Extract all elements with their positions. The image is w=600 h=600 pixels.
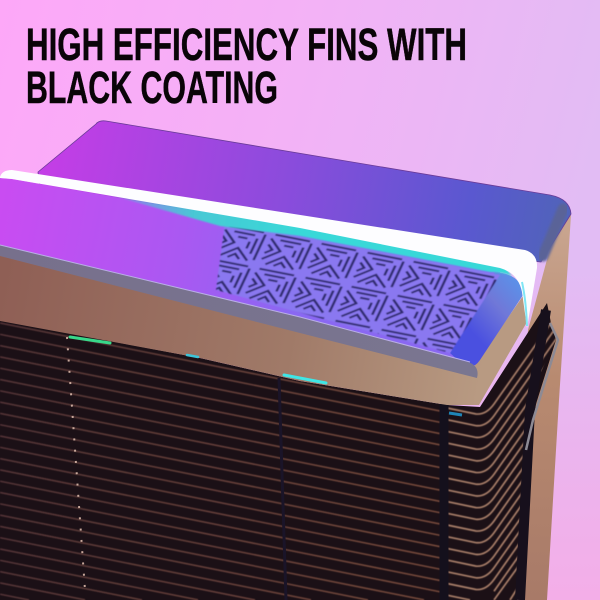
engraved triangle pattern	[216, 222, 500, 353]
fin edge highlights	[67, 337, 85, 590]
right side face of heatsink	[512, 215, 571, 600]
cyan tip of light bar	[522, 282, 527, 326]
cyan LED glint	[284, 375, 326, 383]
title: BLACK COATING	[26, 62, 278, 113]
front tan cap face	[0, 250, 527, 405]
dark vertical channel, right	[440, 404, 448, 600]
side slot outline	[526, 323, 558, 450]
back top plate	[38, 121, 571, 262]
fin highlight lines, main stack	[0, 323, 440, 600]
grey bevel edge	[0, 245, 478, 378]
heatsink fins	[0, 303, 560, 600]
green LED glint	[70, 337, 110, 343]
small cyan glint	[187, 355, 198, 357]
fin highlight lines, curved corner stack	[447, 310, 560, 600]
front top plate	[0, 178, 500, 366]
teal glow under light bar	[100, 192, 512, 276]
small blue glint	[449, 413, 462, 415]
dark channel at right edge	[520, 310, 546, 600]
bevel highlight	[0, 245, 470, 362]
title	[26, 19, 467, 113]
plate corner bevel	[543, 209, 563, 256]
dark fin block	[0, 303, 556, 600]
white RGB light bar	[0, 170, 537, 328]
dark vertical channel, middle	[279, 378, 286, 600]
rounded cap end	[450, 272, 523, 367]
